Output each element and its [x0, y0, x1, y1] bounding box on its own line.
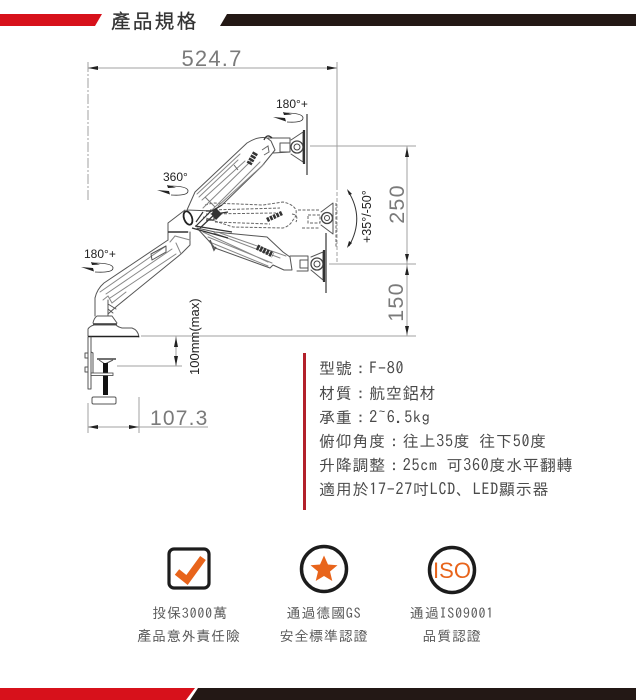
gas spring tip — [108, 304, 116, 313]
dimension: height 250: 250 — [385, 184, 409, 224]
badge: ISO certification: 品質認證 — [422, 629, 482, 643]
desk mount base — [88, 298, 139, 337]
tilt angle arc and label: +35°/-50° — [360, 190, 374, 243]
rotation label: 180 top: 180°+ — [276, 97, 308, 111]
rotation label: 180 left — [81, 247, 116, 272]
dimension: height 250 — [310, 146, 416, 336]
badge: ISO certification — [410, 548, 494, 643]
elbow hub — [182, 205, 232, 238]
dimension: height 150 — [141, 266, 416, 336]
specification list: 適用於17-27吋LCD、LED顯示器 — [319, 481, 549, 497]
dimension: clamp 100mm max — [117, 298, 202, 375]
lower arm down position — [197, 228, 326, 293]
rotation label: 180 top — [273, 97, 308, 122]
specification list: 升降調整：25cm 可360度水平翻轉 — [319, 456, 573, 473]
icon: checkmark box — [169, 549, 209, 588]
badge: insurance: 投保3000萬 — [152, 606, 228, 620]
middle arm dashed position — [203, 202, 336, 248]
upper arm raised position — [187, 114, 307, 212]
icon: ISO circle: ISO — [433, 558, 471, 583]
red header bar — [0, 14, 102, 26]
specification list: 材質：航空鋁材 — [319, 385, 436, 401]
dimension: total width 524.7 — [88, 46, 337, 262]
dimension: total width 524.7: 524.7 — [181, 46, 243, 71]
footer bar — [0, 688, 636, 700]
header banner — [0, 5, 636, 34]
heading: 產品規格 — [111, 5, 199, 34]
badge: ISO certification: 通過IS09001 — [410, 606, 494, 620]
badge: GS certification: 通過德國GS — [287, 606, 361, 620]
clamp — [85, 337, 116, 404]
specification list: 俯仰角度：往上35度 往下50度 — [319, 432, 547, 449]
dimension: height 150: 150 — [384, 282, 408, 322]
red divider for specifications — [303, 353, 306, 510]
rotation label: 180 left: 180°+ — [84, 247, 116, 261]
specification list: 型號：F-80 — [319, 360, 404, 376]
black header bar — [220, 14, 636, 26]
specification list — [319, 360, 573, 497]
badge: insurance: 產品意外責任險 — [137, 628, 241, 643]
rotation label: 360: 360° — [163, 170, 188, 184]
rotation label: 360 — [157, 170, 188, 195]
badge: GS certification: 安全標準認證 — [280, 629, 368, 643]
lower base arm — [95, 210, 190, 314]
dimension: clamp depth 107.3: 107.3 — [150, 407, 209, 430]
monitor arm drawing — [85, 114, 336, 404]
badge: GS certification — [280, 546, 368, 643]
dimension: clamp depth 107.3 — [88, 397, 209, 433]
dimension: clamp 100mm max: 100mm(max) — [187, 298, 202, 375]
tilt angle arc and label — [347, 189, 374, 248]
icon: star circle — [302, 546, 346, 592]
specification list: 承重：2~6.5kg — [319, 409, 430, 425]
badge: insurance — [137, 549, 241, 643]
